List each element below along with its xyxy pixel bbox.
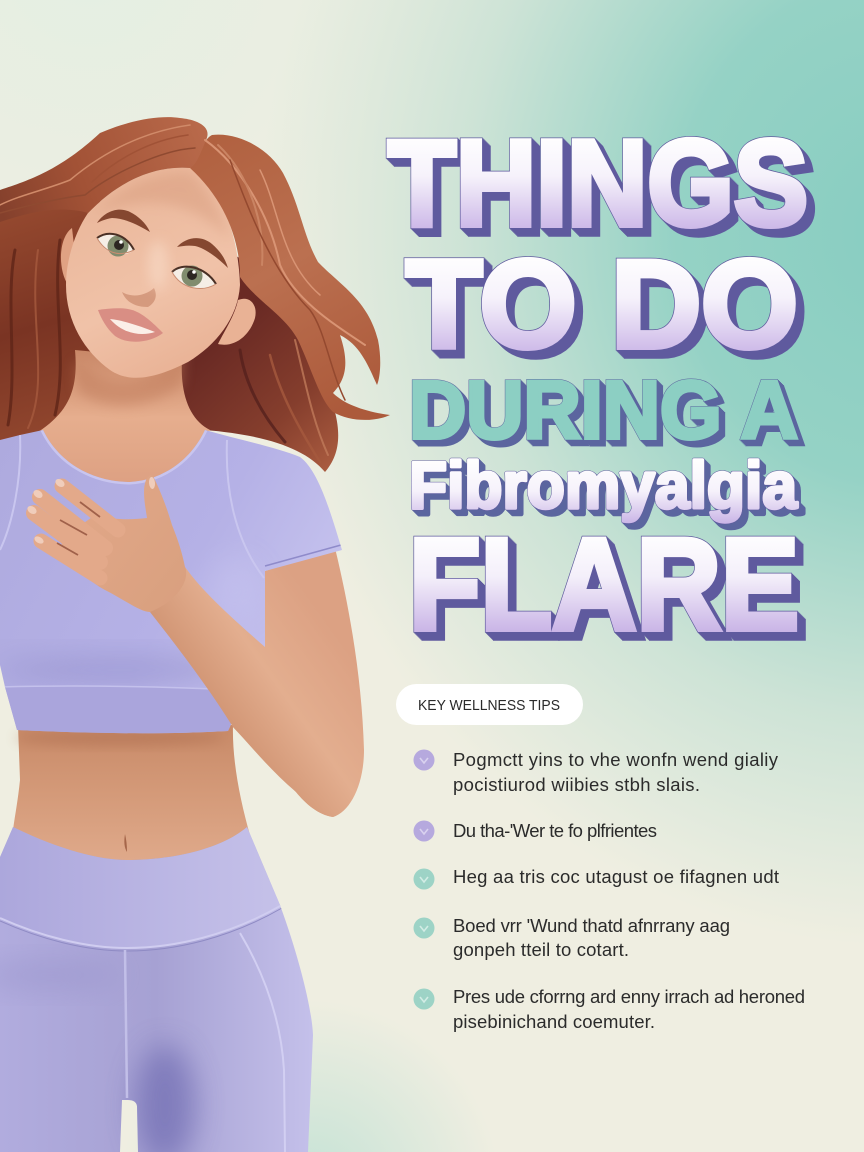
torso midriff — [13, 725, 250, 895]
chest shading — [0, 656, 245, 684]
tip 5 — [414, 986, 805, 1032]
tip 1 — [414, 749, 779, 795]
title line: FLARE: FLARE — [409, 511, 799, 657]
title line: DURING A: DURING A — [409, 365, 798, 456]
title — [388, 115, 808, 657]
title line: THINGS: THINGS — [388, 115, 808, 251]
palm and thumb — [60, 475, 186, 612]
tip 4 — [414, 915, 730, 960]
icon: teal check 5 — [414, 988, 434, 1010]
hand over chest — [26, 475, 186, 612]
cheek highlight — [148, 241, 168, 289]
neck ribbing — [43, 430, 205, 482]
neck and chest — [38, 350, 210, 490]
seams — [125, 950, 127, 1098]
neck shadow under chin — [75, 350, 185, 406]
tip 5: pisebinichand coemuter. — [453, 1011, 655, 1032]
smile — [98, 308, 163, 342]
tip 5: Pres ude cforrng ard enny irrach ad heroned — [453, 986, 805, 1007]
right ear — [218, 299, 256, 345]
nose — [122, 288, 156, 307]
icon: teal check 4 — [414, 918, 434, 938]
title line: TO DO: TO DO — [406, 236, 798, 374]
fingers — [34, 486, 118, 578]
sleeve hem — [265, 545, 341, 566]
eyebrows — [97, 210, 228, 268]
fingernails — [26, 477, 156, 545]
tip 3: Heg aa tris coc utagust oe fifagnen udt — [453, 866, 779, 887]
title line: TO DO: TO DO — [406, 236, 798, 374]
hair back right — [170, 255, 338, 472]
icon: teal check 3 — [414, 868, 434, 890]
title line: THINGS: THINGS — [388, 115, 808, 251]
face — [66, 168, 240, 378]
crop top — [0, 425, 345, 740]
navel — [124, 834, 127, 852]
leggings shading — [135, 1045, 195, 1152]
left ear — [61, 228, 78, 285]
title line: Fibromyalgia: Fibromyalgia — [409, 448, 798, 522]
upper arm — [233, 548, 364, 817]
finger gaps — [57, 502, 100, 555]
tip 2: Du tha-'Wer te fo plfrientes — [453, 820, 657, 841]
hair back left — [0, 200, 110, 442]
belly shading — [15, 730, 225, 746]
title line: Fibromyalgia: Fibromyalgia — [409, 448, 798, 522]
forearm — [150, 567, 348, 817]
hair left sweep — [0, 117, 208, 222]
tip 4: gonpeh tteil to cotart. — [453, 939, 629, 960]
title line: DURING A: DURING A — [409, 365, 798, 456]
icon: purple check 1 — [414, 750, 434, 770]
hair strands — [0, 125, 365, 400]
forehead shadow — [92, 172, 230, 240]
tip 4: Boed vrr 'Wund thatd afnrrany aag — [453, 915, 730, 936]
back hair strands — [8, 240, 328, 462]
hair right lock — [190, 135, 390, 420]
bottom band — [5, 688, 231, 734]
title line: FLARE: FLARE — [409, 511, 799, 657]
badge: key wellness tips — [396, 684, 583, 725]
tip 1: Pogmctt yins to vhe wonfn wend gialiy — [453, 749, 779, 770]
list: wellness tips — [414, 749, 805, 1032]
tip 1: pocistiurod wiibies stbh slais. — [453, 774, 700, 795]
illustration: woman with red hair in lavender activewear — [0, 117, 390, 1152]
badge: key wellness tips: KEY WELLNESS TIPS — [418, 698, 560, 714]
waistband — [0, 827, 282, 948]
eyes — [97, 234, 216, 288]
leggings — [0, 820, 320, 1152]
icon: purple check 2 — [414, 820, 434, 842]
